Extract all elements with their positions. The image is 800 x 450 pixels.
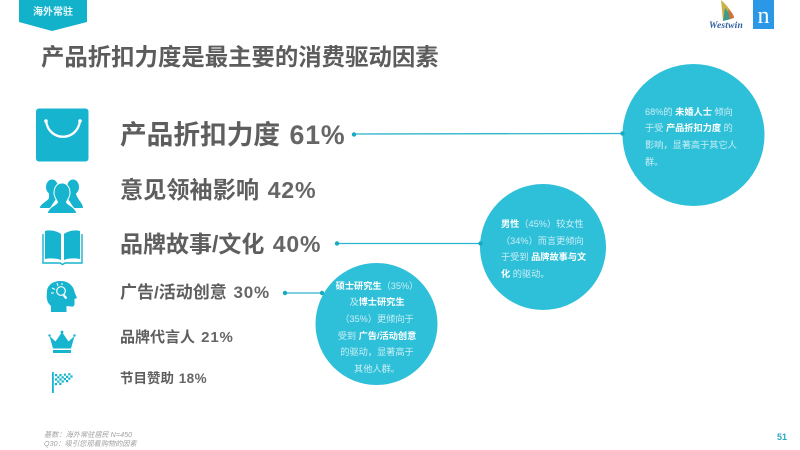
callout: bottom text: 的驱动，显著高于 — [340, 347, 414, 357]
callout: top right text — [645, 106, 737, 167]
callout: bottom text: 受到 广告/活动创意 — [338, 331, 416, 341]
logo: Westwin sail — [721, 0, 734, 21]
connector: advertising to bottom circle — [283, 291, 324, 295]
callout: middle text: 男性（45%）较女性 — [501, 219, 584, 229]
icon: checkered flag — [52, 372, 73, 393]
footnote: 基数：海外常驻居民 N=450 — [44, 430, 132, 439]
icon: people — [40, 180, 83, 214]
callout: top right text: 影响，显著高于其它人 — [645, 140, 737, 150]
callout: bottom text: 其他人群。 — [354, 364, 400, 374]
label: discount: 产品折扣力度 61% — [120, 120, 345, 150]
circle: middle — [480, 184, 606, 310]
circle: top right — [622, 64, 764, 206]
logo letter: n: n — [758, 3, 770, 29]
callout: top right text: 68%的 未婚人士 倾向 — [645, 106, 733, 116]
label: sponsorship: 节目赞助 18% — [120, 371, 207, 386]
label: endorser: 品牌代言人 21% — [120, 328, 234, 346]
icon: open book — [43, 230, 82, 264]
callout: bottom text — [336, 280, 418, 374]
callout: top right text: 于受 产品折扣力度 的 — [645, 123, 733, 133]
callout: middle text — [501, 219, 586, 279]
footnote — [44, 430, 138, 448]
logo text: Westwin: Westwin — [709, 21, 743, 31]
tag text: 海外常驻 — [33, 7, 73, 18]
callout: middle text: 于受到 品牌故事与文 — [501, 252, 586, 262]
tag ribbon — [19, 0, 87, 31]
callout: bottom text: （35%）更倾向于 — [340, 314, 414, 324]
connector: discount to top circle — [352, 131, 625, 137]
circle: bottom — [316, 263, 438, 385]
title: 产品折扣力度是最主要的消费驱动因素 — [41, 44, 439, 70]
icon: shopping bag — [36, 108, 88, 162]
callout: top right text: 群。 — [645, 157, 663, 167]
icon: crown — [48, 331, 76, 353]
page number: 51 — [777, 432, 787, 442]
icon: head with light bulb — [47, 281, 77, 312]
footnote: Q30：吸引您观看购物的因素 — [44, 439, 137, 448]
connector: brand story to middle circle — [335, 241, 483, 246]
label: brand story: 品牌故事/文化 40% — [120, 230, 321, 256]
logo: Nielsen — [753, 0, 774, 29]
callout: bottom text: 硕士研究生（35%） — [336, 280, 418, 290]
callout: bottom text: 及博士研究生 — [349, 297, 405, 307]
callout: middle text: （34%）而言更倾向 — [501, 236, 584, 246]
callout: middle text: 化 的驱动。 — [501, 269, 550, 279]
label: advertising: 广告/活动创意 30% — [120, 282, 270, 302]
label: KOL: 意见领袖影响 42% — [120, 176, 316, 202]
